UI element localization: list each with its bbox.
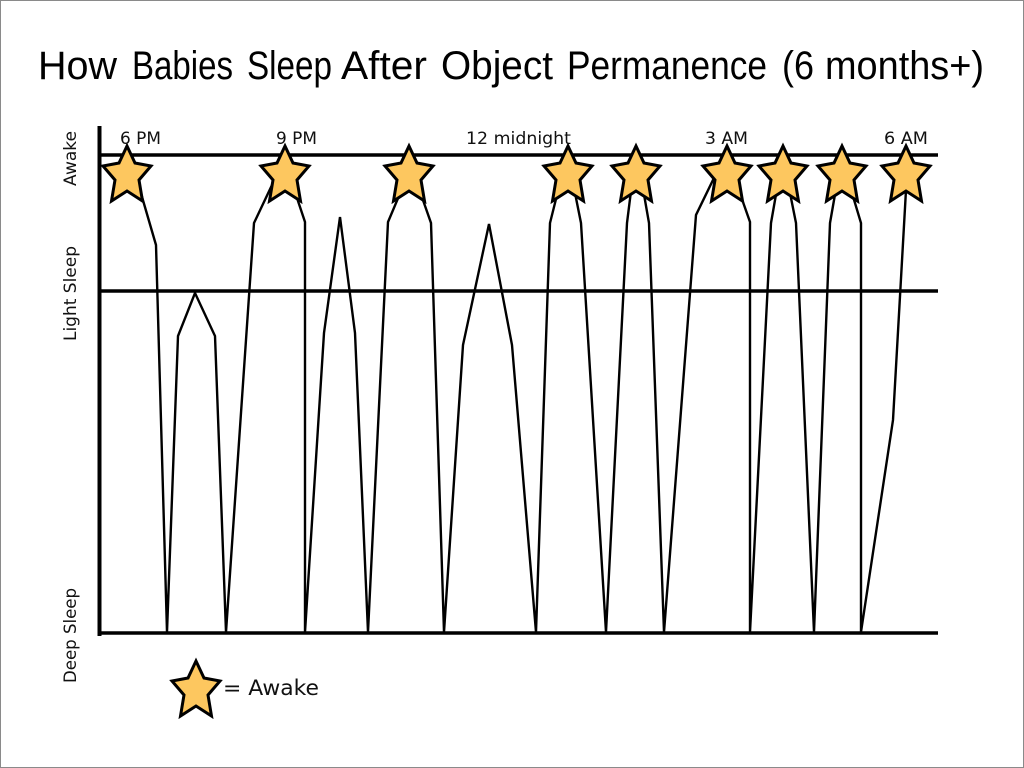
- sleep trace line: [140, 178, 906, 632]
- legend: [172, 661, 319, 716]
- title: How: [38, 44, 117, 88]
- title: months+): [825, 44, 984, 88]
- awake stars: [103, 146, 930, 201]
- icon: star: [172, 661, 220, 716]
- y-axis labels: [61, 131, 80, 683]
- time labels: 12 midnight: [466, 129, 572, 148]
- axes and level lines: [98, 126, 938, 636]
- title: After: [341, 44, 427, 88]
- time labels: 6 PM: [120, 129, 161, 148]
- title: (6: [782, 44, 814, 88]
- title: Sleep: [247, 44, 332, 88]
- title: Permanence: [567, 44, 767, 88]
- title: Object: [441, 44, 553, 88]
- time labels: 6 AM: [884, 129, 928, 148]
- time labels: [120, 129, 928, 148]
- y-axis labels: Light Sleep: [61, 246, 80, 341]
- time labels: 9 PM: [276, 129, 317, 148]
- chart: sleep cycle: [61, 126, 938, 683]
- y-axis labels: Deep Sleep: [61, 588, 80, 683]
- legend text: = Awake: [223, 676, 319, 701]
- title: Babies: [132, 44, 233, 88]
- time labels: 3 AM: [705, 129, 748, 148]
- y-axis labels: Awake: [61, 131, 80, 186]
